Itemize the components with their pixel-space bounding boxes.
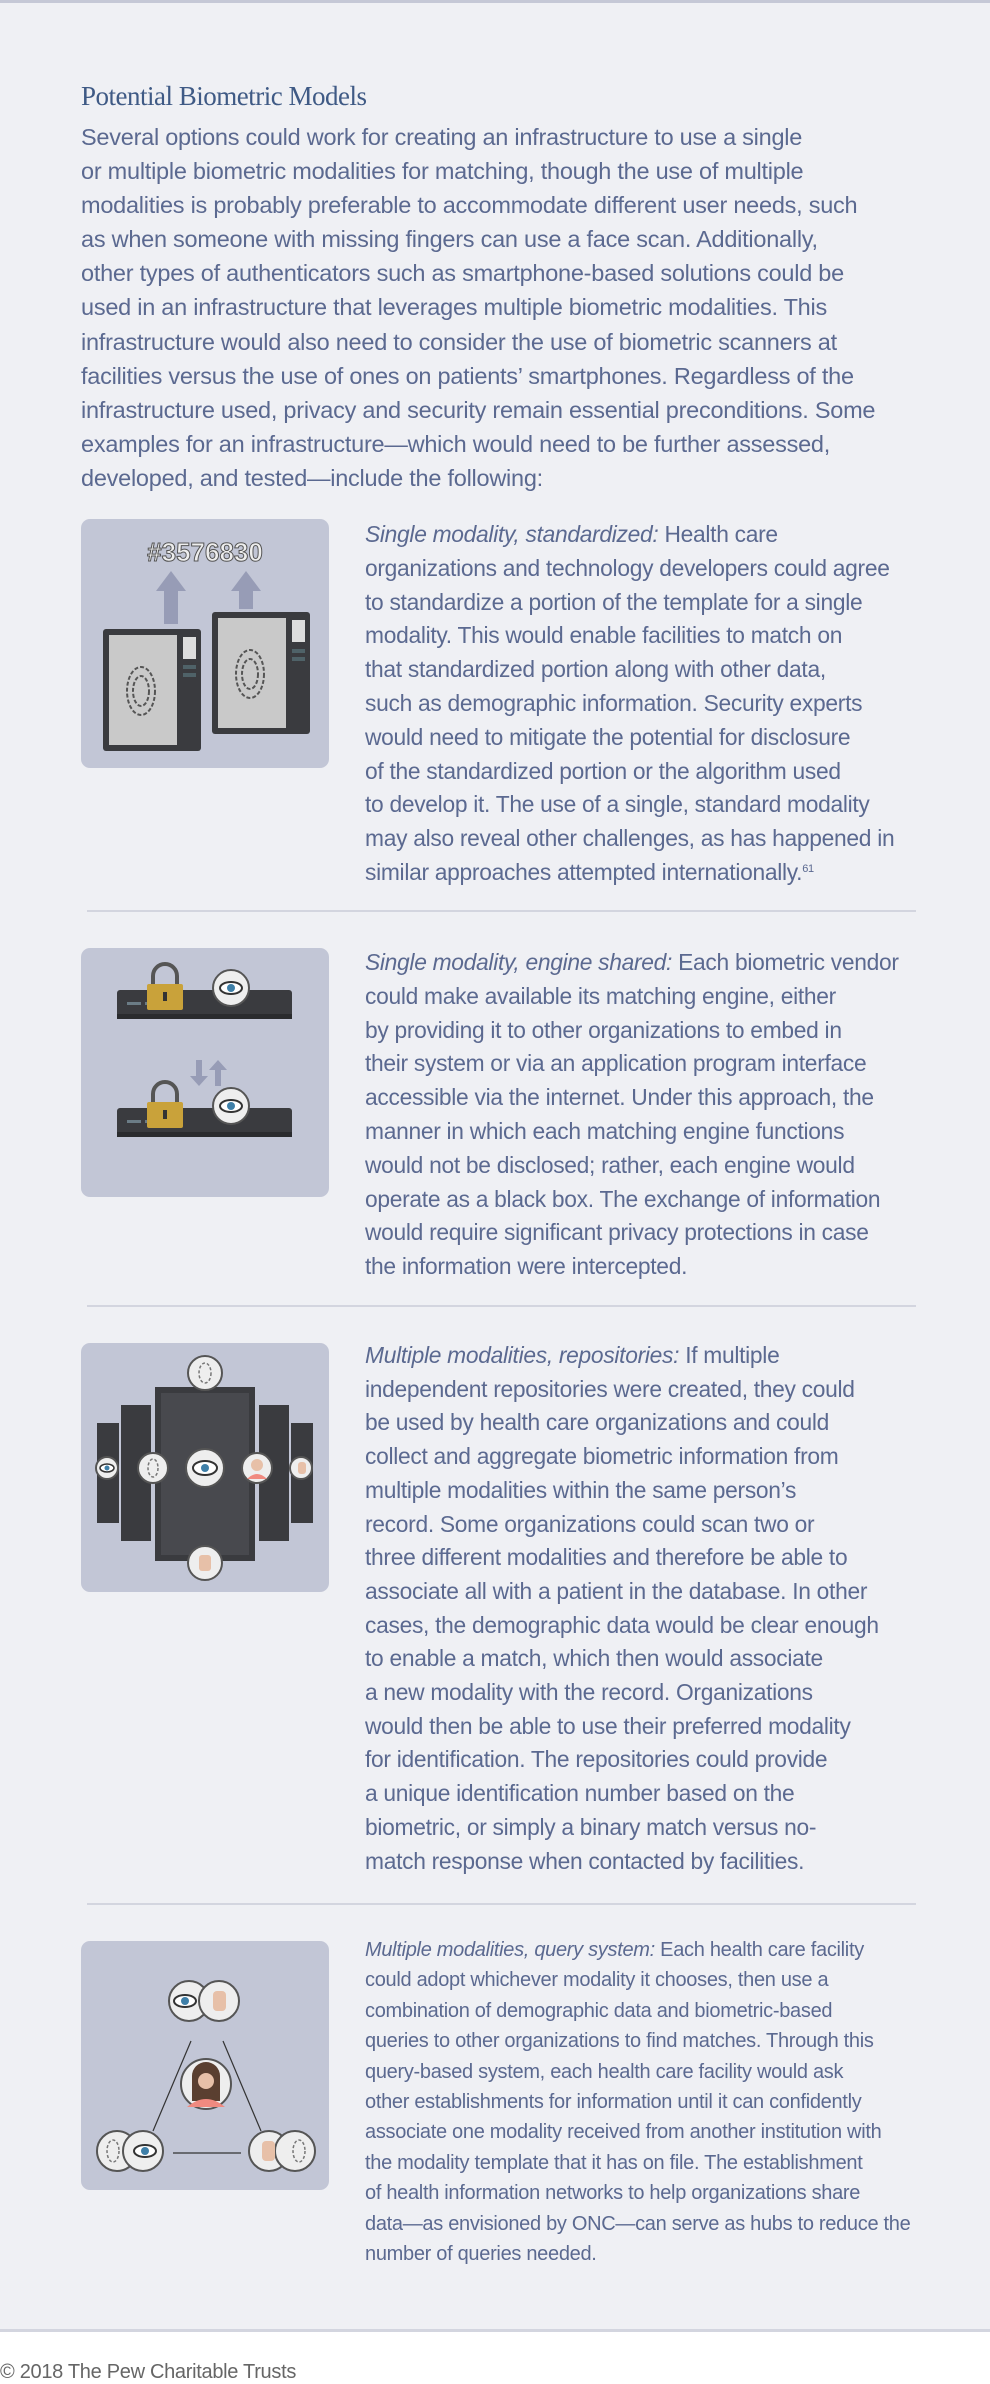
text: query system: queries to other organizations to find matches. Through this: [365, 2030, 874, 2052]
text: single modality standardized: similar approaches attempted internationally.61: [365, 859, 814, 885]
intro text: Several options could work for creating an infrastructure to use a single: [81, 124, 802, 150]
text: single modality standardized: modality. This would enable facilities to match on: [365, 622, 842, 648]
panel: single modality engine shared: [81, 948, 899, 1279]
text: repositories: a unique identification number based on the: [365, 1780, 794, 1806]
icon: servers with locks: [81, 948, 329, 1197]
text: query system: could adopt whichever modality it chooses, then use a: [365, 1969, 828, 1991]
text: query system: the modality template that it has on file. The establishment: [365, 2152, 862, 2174]
text: engine shared: could make available its matching engine, either: [365, 983, 836, 1009]
intro text: other types of authenticators such as smartphone-based solutions could be: [81, 260, 844, 286]
icon: fingerprint scanners: [81, 519, 329, 768]
text: repositories: Multiple modalities, repositories: If multiple: [365, 1342, 779, 1368]
text: engine shared: their system or via an application program interface: [365, 1050, 866, 1076]
intro text: used in an infrastructure that leverages multiple biometric modalities. This: [81, 294, 827, 320]
text: repositories: would then be able to use their preferred modality: [365, 1713, 851, 1739]
intro text: modalities is probably preferable to accommodate different user needs, such: [81, 192, 857, 218]
text: repositories: three different modalities and therefore be able to: [365, 1544, 847, 1570]
icon: query triangle: [81, 1941, 329, 2190]
footer: © 2018 The Pew Charitable Trusts: [0, 2361, 296, 2383]
intro text: as when someone with missing fingers can use a face scan. Additionally,: [81, 226, 818, 252]
text: query system: number of queries needed.: [365, 2243, 597, 2265]
text: repositories: match response when contacted by facilities.: [365, 1848, 804, 1874]
text: engine shared: operate as a black box. The exchange of information: [365, 1186, 880, 1212]
text: repositories: multiple modalities within the same person’s: [365, 1477, 796, 1503]
text: query system: combination of demographic data and biometric-based: [365, 2000, 832, 2022]
text: query system: data—as envisioned by ONC—can serve as hubs to reduce the: [365, 2213, 910, 2235]
panel: multiple modalities query system: [81, 1939, 910, 2265]
text: repositories: [365, 1342, 879, 1874]
intro text: examples for an infrastructure—which would need to be further assessed,: [81, 431, 830, 457]
text: repositories: independent repositories were created, they could: [365, 1376, 855, 1402]
text: repositories: be used by health care organizations and could: [365, 1409, 829, 1435]
intro text: or multiple biometric modalities for matching, though the use of multiple: [81, 158, 803, 184]
intro text: infrastructure would also need to consider the use of biometric scanners at: [81, 329, 837, 355]
icon: repository servers: [81, 1343, 329, 1592]
text: repositories: associate all with a patient in the database. In other: [365, 1578, 867, 1604]
text: engine shared: accessible via the internet. Under this approach, the: [365, 1084, 874, 1110]
text: single modality standardized: [365, 521, 894, 885]
text: repositories: collect and aggregate biometric information from: [365, 1443, 838, 1469]
text: engine shared: the information were intercepted.: [365, 1253, 687, 1279]
intro text: [81, 124, 875, 491]
intro text: developed, and tested—include the following:: [81, 465, 543, 491]
title: Potential Biometric Models: [81, 81, 366, 111]
text: engine shared: manner in which each matching engine functions: [365, 1118, 844, 1144]
text: engine shared: by providing it to other organizations to embed in: [365, 1017, 842, 1043]
text: single modality standardized: of the standardized portion or the algorithm used: [365, 758, 841, 784]
text: repositories: a new modality with the record. Organizations: [365, 1679, 813, 1705]
text: single modality standardized: may also reveal other challenges, as has happened in: [365, 825, 894, 851]
text: repositories: biometric, or simply a binary match versus no-: [365, 1814, 816, 1840]
text: query system: Multiple modalities, query system: Each health care facility: [365, 1939, 864, 1961]
text: repositories: record. Some organizations could scan two or: [365, 1511, 814, 1537]
text: query system: associate one modality received from another institution with: [365, 2121, 881, 2143]
text: query system: other establishments for information until it can confidently: [365, 2091, 861, 2113]
text: query system: of health information networks to help organizations share: [365, 2182, 860, 2204]
text: repositories: cases, the demographic data would be clear enough: [365, 1612, 879, 1638]
text: engine shared: would require significant privacy protections in case: [365, 1219, 869, 1245]
panel: multiple modalities repositories: [81, 1342, 879, 1874]
text: single modality standardized: to develop it. The use of a single, standard modality: [365, 791, 870, 817]
text: engine shared: [365, 949, 899, 1279]
text: single modality standardized: organizations and technology developers could agree: [365, 555, 890, 581]
text: single modality standardized: that standardized portion along with other data,: [365, 656, 826, 682]
intro text: infrastructure used, privacy and security remain essential preconditions. Some: [81, 397, 875, 423]
text: query system: query-based system, each health care facility would ask: [365, 2061, 843, 2083]
text: repositories: for identification. The repositories could provide: [365, 1746, 827, 1772]
text: query system: [365, 1939, 910, 2265]
icon: fingerprint scanners: #3576830: [147, 537, 263, 567]
text: engine shared: would not be disclosed; rather, each engine would: [365, 1152, 855, 1178]
text: single modality standardized: to standardize a portion of the template for a single: [365, 589, 862, 615]
text: single modality standardized: such as demographic information. Security experts: [365, 690, 862, 716]
text: single modality standardized: Single modality, standardized: Health care: [365, 521, 778, 547]
text: single modality standardized: would need to mitigate the potential for disclosure: [365, 724, 850, 750]
text: engine shared: Single modality, engine shared: Each biometric vendor: [365, 949, 899, 975]
text: repositories: to enable a match, which then would associate: [365, 1645, 823, 1671]
panel: single modality standardized: [81, 519, 894, 885]
intro text: facilities versus the use of ones on patients’ smartphones. Regardless of the: [81, 363, 854, 389]
